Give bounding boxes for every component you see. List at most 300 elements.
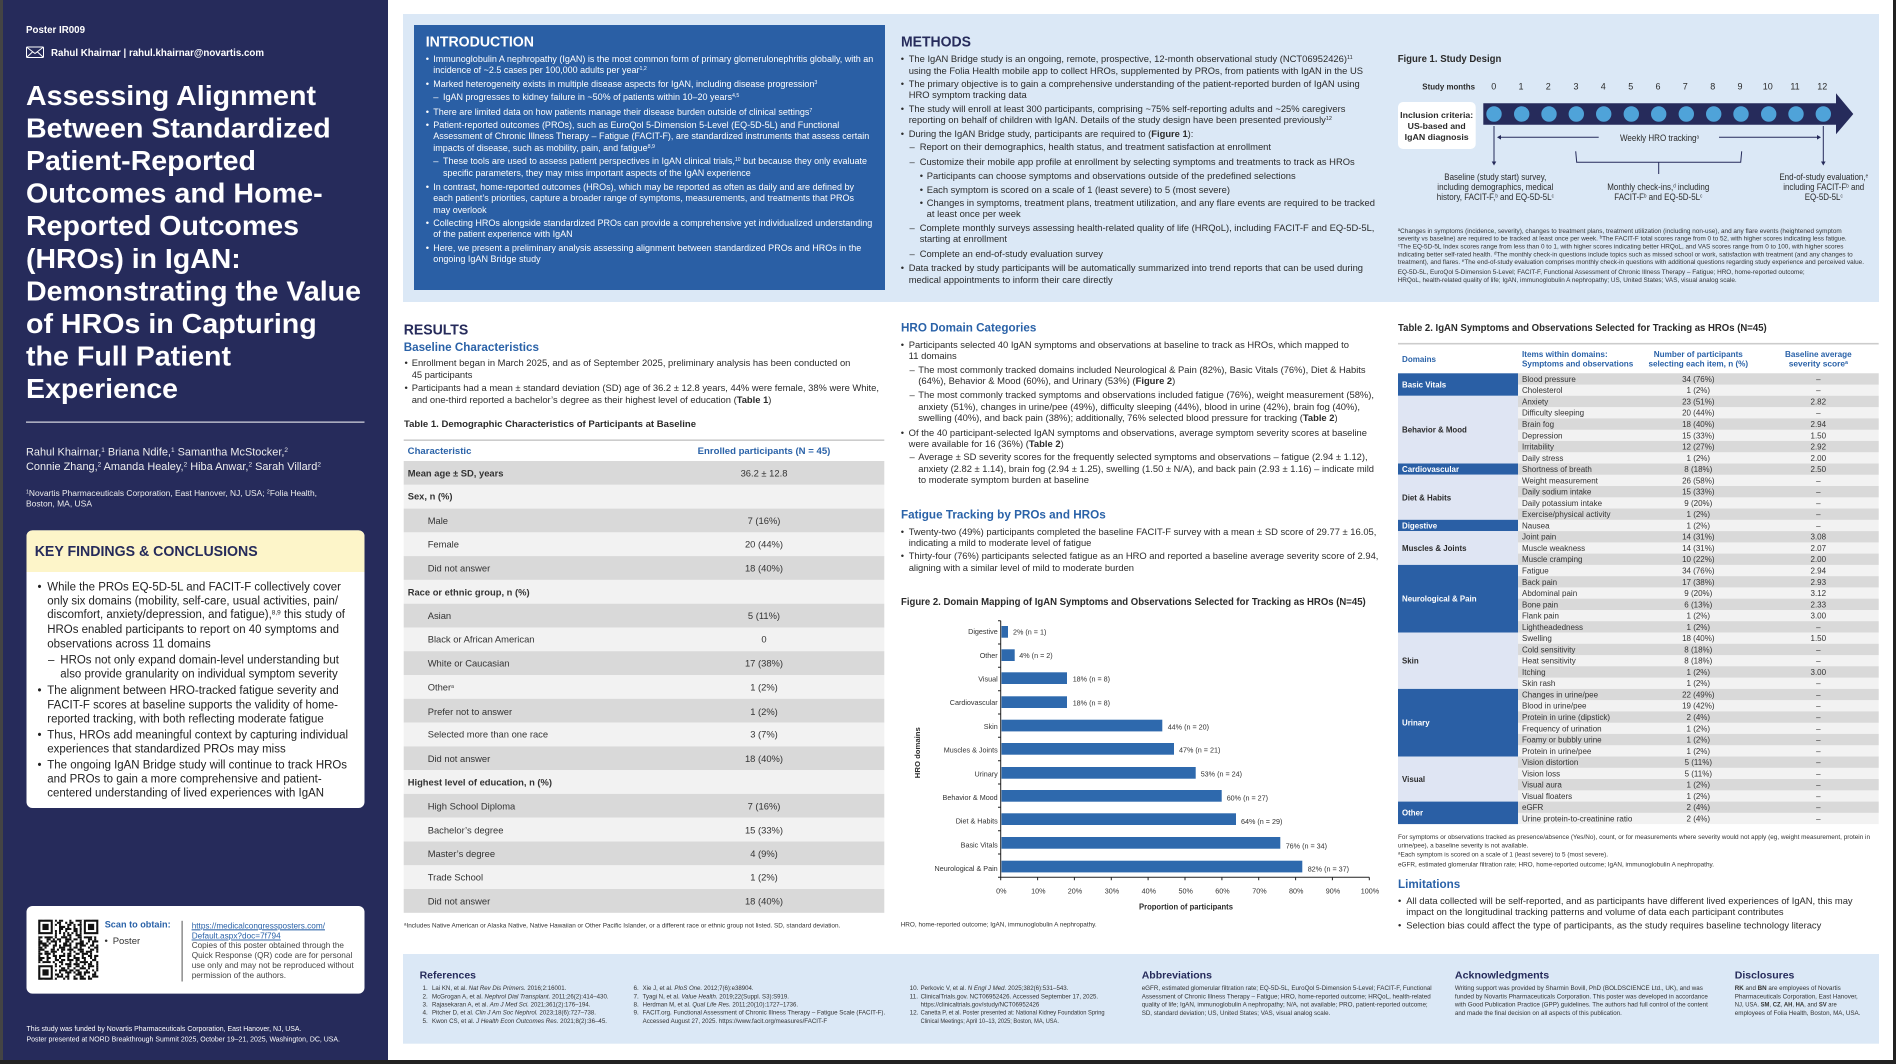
row: trade school: Trade School bbox=[428, 872, 483, 883]
panel: left title sidebar bbox=[3, 0, 388, 1060]
label: baseline survey: and EQ-5D-5L bbox=[1498, 192, 1552, 202]
label: end of study evaluation: End-of-study evaluation, bbox=[1779, 172, 1876, 182]
column: items: Back pain bbox=[1522, 578, 1557, 587]
row: male: Male bbox=[428, 515, 448, 526]
title: Experience bbox=[26, 373, 178, 404]
column: number of participants: 5 (11%) bbox=[1685, 758, 1712, 767]
figure 1 footnotes: The end-of-study evaluation comprises monthly check-in questions with additional questions regarding study experience and perceived value. bbox=[1464, 259, 1864, 266]
HRO domain text: 11 domains bbox=[909, 350, 957, 361]
study month labels: 5 bbox=[1628, 81, 1633, 91]
bar: basic vitals: 76% (n = 34) bbox=[1286, 841, 1327, 850]
bar: digestive: 2% (n = 1) bbox=[1013, 627, 1046, 636]
bar: behavior and mood: 60% (n = 27) bbox=[1227, 793, 1268, 802]
HRO domain text: – bbox=[910, 451, 916, 462]
references column 3: 11. bbox=[910, 993, 918, 1000]
column: baseline severity score: – bbox=[1816, 690, 1821, 700]
column: number of participants: 6 (13%) bbox=[1684, 600, 1713, 609]
introduction text: Patient-reported outcomes (PROs), such as EuroQol 5-Dimension 5-Level (EQ-5D-5L) and Functional bbox=[433, 119, 839, 130]
column: number of participants: 18 (40%) bbox=[1682, 634, 1715, 643]
introduction text: Marked heterogeneity exists in multiple disease aspects for IgAN, including disease progression bbox=[433, 78, 831, 89]
column: items: Joint pain bbox=[1522, 533, 1556, 542]
row: male: 7 (16%) bbox=[748, 515, 780, 526]
column: items: Abdominal pain bbox=[1522, 589, 1577, 598]
study month labels bbox=[1422, 81, 1827, 91]
limitations text: • bbox=[1398, 920, 1401, 931]
poster number: Poster IR009 bbox=[26, 25, 85, 36]
methods text: The primary objective is to gain a comprehensive understanding of the patient-reported burden of IgAN using bbox=[909, 78, 1360, 89]
row: black bbox=[404, 628, 884, 651]
table 1 footnote: Includes Native American or Alaska Native, Native Hawaiian or Other Pacific Islander, or a different race or ethnic group not listed. SD, standard deviation. bbox=[406, 923, 840, 930]
authors bbox=[26, 447, 321, 473]
HRO domain text: anxiety (51%), changes in urine/pee (49%), difficulty sleeping (44%), blood in urine (42%), brain fog (40%), bbox=[918, 401, 1360, 412]
column: items: Visual floaters bbox=[1522, 792, 1572, 801]
methods text: – bbox=[910, 222, 916, 233]
column: number of participants: 2 (4%) bbox=[1687, 814, 1710, 823]
introduction text: ongoing IgAN Bridge study bbox=[433, 253, 541, 264]
references column 2: 6. bbox=[634, 985, 639, 992]
HRO domain text: • bbox=[901, 427, 904, 438]
x axis tick labels: 10% bbox=[1031, 886, 1046, 895]
methods text: Customize their mobile app profile at enrollment by selecting symptoms and treatments to track as HROs bbox=[920, 156, 1355, 167]
introduction text: • bbox=[426, 106, 429, 117]
methods text: • bbox=[901, 103, 904, 114]
key findings text: The alignment between HRO-tracked fatigue severity and bbox=[47, 685, 339, 697]
row: other race: 1 (2%) bbox=[750, 682, 778, 693]
column: items: Nausea bbox=[1522, 521, 1550, 530]
column: number of participants: 15 (33%) bbox=[1682, 431, 1715, 440]
introduction text: • bbox=[426, 242, 429, 253]
column: number of participants: 2 (4%) bbox=[1687, 803, 1710, 812]
table 2 header: severity score bbox=[1789, 359, 1845, 369]
introduction text: Assessment of Chronic Illness Therapy – Fatigue (FACIT-F), are standardized instruments that assess certain bbox=[433, 130, 869, 141]
column: number of participants: 15 (33%) bbox=[1682, 488, 1715, 497]
study month labels: 0 bbox=[1491, 81, 1496, 91]
bar: cardiovascular: Cardiovascular bbox=[950, 698, 998, 707]
column: number of participants: 1 (2%) bbox=[1687, 612, 1710, 621]
column: baseline severity score: – bbox=[1816, 803, 1821, 812]
column: items: Swelling bbox=[1522, 634, 1552, 643]
panel: methods bbox=[901, 35, 1375, 285]
study month labels: 1 bbox=[1518, 81, 1524, 91]
figure 1 footnotes: HRQoL, health-related quality of life; IgAN, immunoglobulin A nephropathy; US, United States; VAS, visual analog scale. bbox=[1398, 277, 1737, 284]
authors: Sarah Villard bbox=[252, 461, 317, 473]
references column 3: 12. bbox=[910, 1009, 919, 1016]
fatigue tracking text: aligning with a similar level of mild to moderate burden bbox=[909, 562, 1134, 573]
timeline arrow bbox=[1483, 93, 1853, 134]
fatigue tracking text bbox=[901, 526, 1378, 573]
column: baseline severity score: 2.50 bbox=[1811, 465, 1827, 474]
label: end of study evaluation: EQ-5D-5L bbox=[1805, 192, 1845, 202]
panel: results and table 1 bbox=[404, 322, 884, 930]
row: master bbox=[404, 842, 884, 865]
label: end of study evaluation: c bbox=[1840, 194, 1843, 200]
column: number of participants: 14 (31%) bbox=[1682, 544, 1715, 553]
acknowledgments: Acknowledgments bbox=[1455, 970, 1549, 982]
title: Demonstrating the Value bbox=[26, 275, 361, 306]
affiliations bbox=[26, 489, 317, 508]
row: mean age: Mean age ± SD, years bbox=[408, 468, 504, 478]
acknowledgments: Writing support was provided by Sharmin Bovill, PhD (BOLDSCIENCE Ltd., UK), and was bbox=[1455, 985, 1703, 992]
copyright notice bbox=[192, 940, 354, 980]
bar: urinary: 53% (n = 24) bbox=[1201, 770, 1242, 779]
label: monthly check-ins: and EQ-5D-5L bbox=[1646, 192, 1700, 202]
figure 1 footnotes bbox=[1398, 227, 1864, 284]
column: baseline severity score: – bbox=[1816, 645, 1821, 654]
column: number of participants: 8 (18%) bbox=[1684, 645, 1713, 654]
column: number of participants: 1 (2%) bbox=[1687, 747, 1710, 756]
row: prefer not to answer bbox=[404, 699, 884, 723]
column: baseline severity score: – bbox=[1816, 488, 1821, 497]
key findings text: centered understanding of lived experiences with IgAN bbox=[47, 788, 324, 800]
label: monthly check-ins: d bbox=[1673, 184, 1676, 190]
column: baseline severity score: 2.94 bbox=[1811, 566, 1827, 576]
icon: QR code bbox=[38, 920, 98, 980]
methods text: 11 bbox=[1347, 55, 1353, 61]
column: baseline severity score: 2.00 bbox=[1811, 555, 1827, 564]
limitations text bbox=[1398, 895, 1853, 931]
x axis tick labels: 80% bbox=[1289, 886, 1304, 895]
introduction text: IgAN progresses to kidney failure in ~50% of patients within 10–20 years bbox=[443, 91, 744, 102]
domain: urinary bbox=[1398, 689, 1518, 756]
row: female bbox=[404, 532, 884, 556]
domain: digestive bbox=[1398, 520, 1518, 531]
references column 2 bbox=[634, 985, 885, 1025]
study month labels: 6 bbox=[1655, 81, 1661, 91]
authors: Samantha McStocker, bbox=[175, 447, 284, 459]
column: number of participants: 19 (42%) bbox=[1682, 702, 1715, 711]
disclosures: employees of Folia Health, Boston, MA, USA. bbox=[1735, 1010, 1861, 1017]
bar: visual bbox=[978, 672, 1110, 684]
HRO domain text: were available for 16 (36%) (Table 2) bbox=[908, 438, 1064, 449]
bar: other: Other bbox=[980, 651, 998, 660]
row: high school: High School Diploma bbox=[428, 800, 516, 812]
row: high school bbox=[404, 794, 884, 818]
funding statement bbox=[26, 1024, 340, 1044]
references column 3: 10. bbox=[910, 985, 919, 992]
column: baseline severity score: – bbox=[1816, 724, 1821, 733]
label: baseline survey: history, FACIT-F, bbox=[1437, 192, 1503, 202]
fatigue tracking text: • bbox=[901, 550, 904, 561]
references column 3 bbox=[910, 985, 1105, 1025]
poster link bbox=[192, 920, 326, 940]
study month labels: 2 bbox=[1546, 81, 1551, 91]
column: baseline severity score: – bbox=[1816, 409, 1821, 418]
references column 1 bbox=[422, 985, 609, 1025]
methods text: • bbox=[901, 262, 904, 273]
table 1 title: Table 1. Demographic Characteristics of Participants at Baseline bbox=[404, 419, 696, 430]
methods text: Report on their demographics, health status, and treatment satisfaction at enrollment bbox=[920, 141, 1271, 152]
column: baseline severity score: – bbox=[1816, 657, 1821, 666]
row: white: 17 (38%) bbox=[745, 658, 783, 669]
key findings text: HROs enabled participants to report on 40 symptoms and bbox=[47, 624, 339, 636]
bar: diet and habits: Diet & Habits bbox=[956, 816, 998, 825]
references column 2: Tyagi N, et al. Value Health. 2019;22(Suppl. S3):S919. bbox=[643, 993, 789, 1000]
bar: skin: 44% (n = 20) bbox=[1168, 722, 1209, 731]
introduction text: – bbox=[433, 91, 439, 102]
label: baseline survey: b bbox=[1495, 194, 1498, 200]
methods text: The IgAN Bridge study is an ongoing, remote, prospective, 12-month observational study (NCT06952426) bbox=[909, 53, 1347, 64]
references column 1: McGrogan A, et al. Nephrol Dial Transplant. 2011;26(2):414–430. bbox=[432, 993, 609, 1000]
column: items: Cholesterol bbox=[1522, 386, 1563, 395]
key findings text bbox=[38, 581, 348, 800]
bar: urinary bbox=[975, 767, 1242, 779]
authors: 2 bbox=[98, 462, 102, 468]
figure 1 footnotes: The EQ-5D-5L Index scores range from less than 0 to 1, with higher scores indicating better HRQoL, and VAS scores range from 0 to 100, with higher scores bbox=[1400, 243, 1844, 250]
bar: digestive: Digestive bbox=[968, 627, 998, 636]
x axis tick labels: 40% bbox=[1142, 886, 1157, 895]
bar: cardiovascular: 18% (n = 8) bbox=[1073, 698, 1110, 707]
title: Assessing Alignment bbox=[26, 80, 316, 111]
key findings text: Thus, HROs add meaningful context by capturing individual bbox=[47, 729, 348, 741]
column: baseline severity score: – bbox=[1816, 679, 1821, 688]
x axis tick labels: 90% bbox=[1326, 886, 1341, 895]
column: baseline severity score: – bbox=[1816, 814, 1821, 823]
figure 1 footnotes: EQ-5D-5L, EuroQol 5-Dimension 5-Level; FACIT-F, Functional Assessment of Chronic Illness Therapy – Fatigue; HRO, home-reported outcome; bbox=[1398, 269, 1805, 276]
table 2 title: Table 2. IgAN Symptoms and Observations Selected for Tracking as HROs (N=45) bbox=[1398, 323, 1767, 334]
key findings text: discomfort, anxiety/depression, and fatigue), bbox=[47, 609, 273, 621]
references bbox=[420, 970, 1105, 1025]
column: number of participants: 10 (22%) bbox=[1682, 555, 1715, 564]
column: items: Blood pressure bbox=[1522, 375, 1576, 384]
column: number of participants bbox=[1682, 375, 1715, 823]
column: items: Bone pain bbox=[1522, 600, 1558, 609]
column: baseline severity score: – bbox=[1816, 713, 1821, 722]
column: number of participants: 1 (2%) bbox=[1687, 781, 1710, 790]
methods text: • bbox=[901, 53, 904, 64]
inclusion criteria box: US-based and bbox=[1408, 121, 1466, 131]
methods text: Changes in symptoms, treatment plans, treatment utilization, and any flare events are required to be tracked bbox=[927, 197, 1375, 208]
row: trade school: 1 (2%) bbox=[750, 872, 778, 883]
panel: QR code card bbox=[26, 906, 364, 994]
figure 1 footnotes: indicating better self-rated health. bbox=[1398, 251, 1494, 258]
column: number of participants: 5 (11%) bbox=[1685, 769, 1712, 778]
column: number of participants: 14 (31%) bbox=[1682, 533, 1715, 542]
references column 3: Perkovic V, et al. N Engl J Med. 2025;382(6):531–543. bbox=[921, 985, 1069, 992]
references column 3: Canetta P, et al. Poster presented at: National Kidney Foundation Spring bbox=[921, 1009, 1105, 1016]
bar: behavior and mood bbox=[943, 790, 1268, 802]
key findings text: – bbox=[48, 654, 55, 666]
references column 1: Kwon CS, et al. J Health Econ Outcomes Res. 2021;8(2):36–45. bbox=[432, 1018, 607, 1025]
figure 1 footnotes: severity vs baseline) are required to be tracked at least once per week. bbox=[1398, 236, 1601, 243]
row: sex did not answer: Did not answer bbox=[428, 563, 490, 574]
references column 1: 2. bbox=[422, 993, 428, 1000]
abbreviations: Abbreviations bbox=[1142, 970, 1212, 982]
introduction text: Immunoglobulin A nephropathy (IgAN) is the most common form of primary glomerulonephritis globally, with an bbox=[433, 53, 873, 64]
inclusion criteria box: IgAN diagnosis bbox=[1405, 132, 1469, 142]
abbreviations: eGFR, estimated glomerular filtration rate; EQ-5D-5L, EuroQol 5-Dimension 5-Level; FACIT-F, Functional bbox=[1142, 985, 1432, 992]
domain: muscles and joints: Muscles & Joints bbox=[1402, 544, 1467, 553]
key findings text: The ongoing IgAN Bridge study will continue to track HROs bbox=[47, 759, 347, 771]
panel: table 2 bbox=[1398, 323, 1879, 869]
methods text: During the IgAN Bridge study, participants are required to (Figure 1): bbox=[909, 128, 1193, 139]
column: items: Weight measurement bbox=[1522, 476, 1599, 485]
row: black: 0 bbox=[761, 634, 767, 645]
bar: neurological and pain: 82% (n = 37) bbox=[1308, 865, 1349, 874]
key findings text: reported tracking, with both reflecting moderate fatigue bbox=[47, 713, 324, 725]
affiliations: Boston, MA, USA bbox=[26, 500, 93, 508]
column: baseline severity score: – bbox=[1816, 623, 1821, 632]
bar chart bbox=[913, 621, 1380, 911]
row: prefer not to answer: Prefer not to answer bbox=[428, 706, 512, 717]
row: sex header bbox=[404, 485, 884, 509]
label: baseline survey: including demographics, medical bbox=[1437, 182, 1553, 192]
column: number of participants: 17 (38%) bbox=[1682, 578, 1715, 587]
domain: neurological and pain bbox=[1398, 565, 1518, 632]
column: items: Brain fog bbox=[1522, 420, 1554, 429]
study month labels: 7 bbox=[1683, 81, 1688, 91]
column: items: Heat sensitivity bbox=[1522, 657, 1576, 666]
fatigue tracking text: indicating a mild to moderate level of fatigue bbox=[909, 537, 1091, 548]
methods text: – bbox=[910, 248, 916, 259]
row: education header bbox=[404, 770, 884, 794]
funding statement: Poster presented at NORD Breakthrough Summit 2025, October 19–21, 2025, Washington, DC, USA. bbox=[26, 1034, 340, 1044]
introduction text: • bbox=[426, 181, 429, 192]
subheading: fatigue tracking: Fatigue Tracking by PROs and HROs bbox=[901, 508, 1106, 522]
table 1 header: Characteristic bbox=[408, 446, 471, 457]
column: items: Muscle cramping bbox=[1522, 555, 1582, 564]
poster link: https://medicalcongressposters.com/ bbox=[192, 920, 326, 930]
introduction text: may overlook bbox=[433, 204, 487, 215]
methods text: • bbox=[920, 170, 923, 181]
HRO domain text: (64%), Behavior & Mood (60%), and Urinary (53%) (Figure 2) bbox=[918, 375, 1175, 386]
figure 1 title: Figure 1. Study Design bbox=[1398, 54, 1501, 65]
panel: introduction bbox=[414, 25, 885, 290]
baseline characteristics text: Enrollment began in March 2025, and as of September 2025, preliminary analysis has been conducted on bbox=[412, 357, 850, 368]
timeline month markers bbox=[1486, 106, 1831, 122]
introduction text: • bbox=[426, 119, 429, 130]
title: of HROs in Capturing bbox=[26, 308, 317, 339]
authors: 1 bbox=[101, 447, 105, 454]
x axis tick labels: 70% bbox=[1252, 886, 1267, 895]
introduction text: specific parameters, they may miss important aspects of the IgAN experience bbox=[443, 167, 751, 178]
bar: diet and habits: 64% (n = 29) bbox=[1241, 817, 1282, 826]
introduction text: • bbox=[426, 78, 429, 89]
bar: basic vitals: Basic Vitals bbox=[961, 840, 998, 849]
disclosures: RK and BN are employees of Novartis bbox=[1735, 985, 1841, 992]
references column 2: 9. bbox=[634, 1009, 639, 1016]
methods text: medical appointments to inform their care directly bbox=[909, 274, 1113, 285]
row: master: Master’s degree bbox=[428, 848, 495, 859]
row: asian bbox=[404, 604, 884, 628]
column: number of participants: 1 (2%) bbox=[1687, 454, 1710, 463]
HRO domain text: • bbox=[901, 339, 904, 350]
methods text: starting at enrollment bbox=[920, 233, 1007, 244]
methods text: Complete an end-of-study evaluation survey bbox=[920, 248, 1103, 259]
figure 1 footnotes: treatment), and flares. bbox=[1398, 259, 1461, 266]
study month labels: 4 bbox=[1601, 81, 1606, 91]
x axis tick labels: 100% bbox=[1361, 886, 1380, 895]
key findings text: also provide granularity on individual symptom severity bbox=[60, 668, 338, 680]
limitations text: All data collected will be self-reported, and as participants have different lived experiences of IgAN, this may bbox=[1406, 895, 1853, 906]
authors: 2 bbox=[284, 447, 288, 454]
figure 1 footnotes: b bbox=[1600, 235, 1603, 240]
abbreviations: quality of life; IgAN, immunoglobulin A nephropathy; N/A, not available; PRO, patient-reported outcome; bbox=[1142, 1002, 1428, 1009]
authors: Briana Ndife, bbox=[105, 447, 171, 459]
row: mean age: 36.2 ± 12.8 bbox=[741, 468, 787, 478]
column: baseline severity score: – bbox=[1816, 769, 1821, 778]
abbreviations bbox=[1142, 970, 1432, 1017]
column: items: Protein in urine/pee bbox=[1522, 747, 1592, 756]
column: items: Blood in urine/pee bbox=[1522, 702, 1587, 711]
table 1 header bbox=[408, 446, 830, 457]
label: monthly check-ins: c bbox=[1700, 194, 1703, 200]
HRO domain text: Of the 40 participant-selected IgAN symptoms and observations, average symptom severity scores at baseline bbox=[909, 427, 1367, 438]
scan item: poster: • bbox=[104, 936, 108, 947]
authors: 2 bbox=[184, 462, 188, 468]
icon: envelope bbox=[26, 47, 44, 58]
key findings text: FACIT-F scores at baseline supports the validity of home- bbox=[47, 699, 338, 711]
row: trade school bbox=[404, 865, 884, 889]
authors: Rahul Khairnar, bbox=[26, 447, 102, 459]
subheading: HRO domain categories: HRO Domain Categories bbox=[901, 321, 1037, 335]
bar: skin: Skin bbox=[984, 722, 998, 731]
key findings text: experiences that standardized PROs may miss bbox=[47, 744, 286, 756]
column: number of participants: 2 (4%) bbox=[1687, 713, 1710, 722]
panel: limitations bbox=[1398, 877, 1853, 931]
references column 3: Clinical Meetings; April 10–13, 2025; Boston, MA, USA. bbox=[921, 1018, 1059, 1025]
column: items: Shortness of breath bbox=[1522, 465, 1592, 474]
column: number of participants: 26 (58%) bbox=[1682, 476, 1715, 485]
row: race header bbox=[404, 580, 884, 604]
poster link: Default.aspx?doc=7f794 bbox=[192, 930, 281, 940]
introduction text: 4,5 bbox=[732, 93, 739, 99]
label: end of study evaluation bbox=[1779, 172, 1868, 202]
key findings text: observations across 11 domains bbox=[47, 638, 211, 650]
title: Patient-Reported bbox=[26, 145, 256, 176]
copyright notice: Quick Response (QR) code are for personal bbox=[192, 950, 352, 960]
column: baseline severity score: 1.50 bbox=[1811, 634, 1827, 643]
references: References bbox=[420, 970, 476, 982]
abbreviations: Assessment of Chronic Illness Therapy – Fatigue; HRO, home-reported outcome; HRQoL, health-related bbox=[1142, 993, 1431, 1000]
column: items: Muscle weakness bbox=[1522, 544, 1585, 553]
x axis tick labels: 0% bbox=[996, 886, 1007, 895]
row: prefer not to answer: 1 (2%) bbox=[750, 706, 778, 717]
domain: cardiovascular bbox=[1398, 464, 1518, 475]
column: number of participants: 1 (2%) bbox=[1687, 386, 1710, 395]
bar: other: 4% (n = 2) bbox=[1019, 651, 1053, 660]
column: items: Lightheadedness bbox=[1522, 623, 1583, 632]
arrow: end of study bbox=[1821, 126, 1826, 166]
references column 2: 7. bbox=[634, 993, 639, 1000]
acknowledgments: funded by Novartis Pharmaceuticals Corporation. This poster was developed in accordance bbox=[1455, 993, 1708, 1000]
table 2 footnotes: Each symptom is scored on a scale of 1 (least severe) to 5 (most severe). bbox=[1400, 852, 1608, 859]
key findings text: only six domains (mobility, self-care, usual activities, pain/ bbox=[47, 595, 339, 607]
domain column bbox=[1398, 373, 1518, 824]
column: items: Daily stress bbox=[1522, 454, 1563, 463]
table 2 footnotes: For symptoms or observations tracked as presence/absence (Yes/No), count, or for measurements where severity would not apply (eg, weight measurement, protein in bbox=[1398, 834, 1870, 841]
column: baseline severity score: – bbox=[1816, 386, 1821, 395]
abbreviations: SD, standard deviation; US, United States; VAS, visual analog scale. bbox=[1142, 1010, 1331, 1017]
column: baseline severity score: 3.08 bbox=[1811, 533, 1827, 542]
copyright notice: use only and may not be reproduced without bbox=[192, 960, 354, 970]
methods text: • bbox=[920, 197, 923, 208]
label: monthly check-ins: including bbox=[1676, 182, 1709, 192]
introduction text: impacts of disease, such as mobility, pain, and fatigue bbox=[433, 142, 657, 153]
authors: 2 bbox=[248, 462, 252, 468]
affiliations: Novartis Pharmaceuticals Corporation, East Hanover, NJ, USA; bbox=[29, 489, 267, 498]
table 2 header: Symptoms and observations bbox=[1522, 359, 1634, 369]
domain: visual: Visual bbox=[1402, 775, 1425, 784]
domain: skin: Skin bbox=[1402, 657, 1419, 666]
domain: basic vitals bbox=[1398, 373, 1518, 396]
row: asian: Asian bbox=[428, 610, 451, 621]
panel: fatigue tracking bbox=[901, 508, 1378, 573]
row: race did not answer: Did not answer bbox=[428, 753, 490, 764]
column: baseline severity score: 2.94 bbox=[1811, 420, 1827, 429]
methods text: HRO symptom tracking data bbox=[909, 89, 1027, 100]
subheading: baseline characteristics: Baseline Characteristics bbox=[404, 340, 539, 354]
references column 1: Pitcher D, et al. Clin J Am Soc Nephrol. 2023;18(6):727–738. bbox=[432, 1009, 596, 1016]
